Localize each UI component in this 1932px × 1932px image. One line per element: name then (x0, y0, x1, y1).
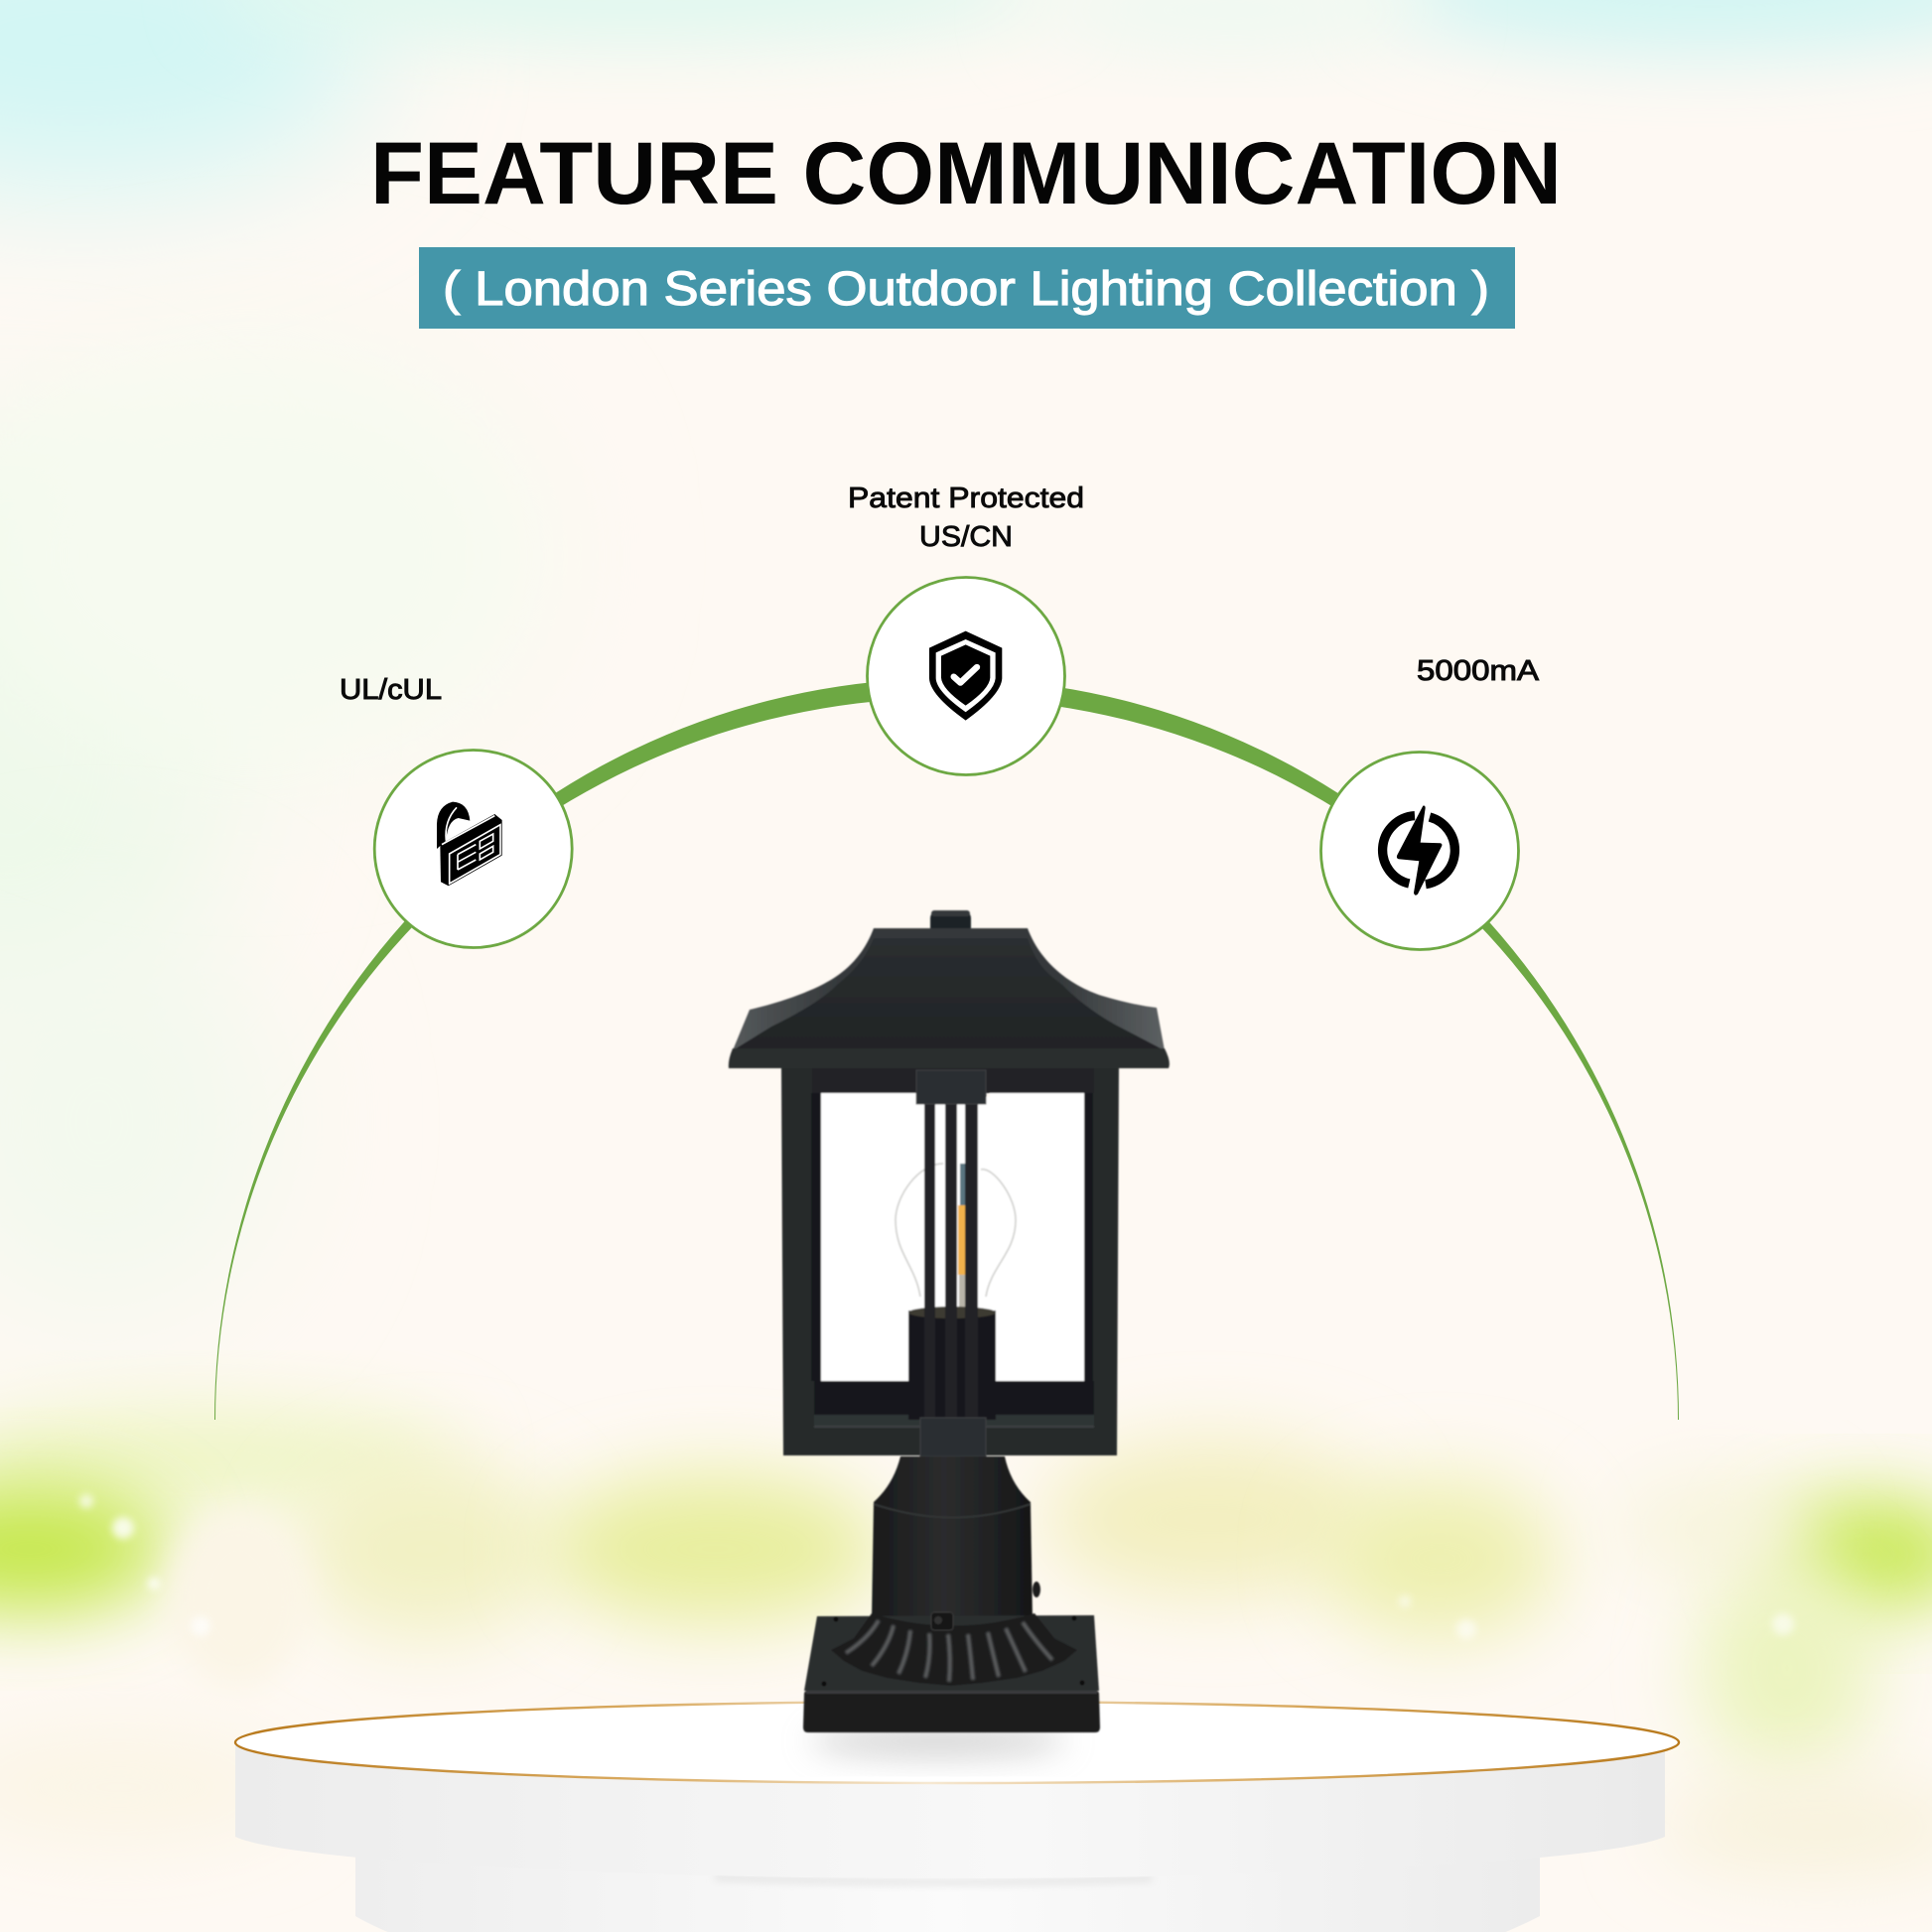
podium upper tier side (235, 1742, 1665, 1878)
feature node: UL/cUL (340, 674, 572, 947)
lamp socket (908, 1307, 996, 1420)
lamp neck (872, 1456, 1033, 1618)
fluted flange (831, 1613, 1077, 1686)
label: 5000mA: 5000mA (1417, 655, 1540, 687)
podium top surface with gold rim (235, 1702, 1679, 1783)
podium (235, 1702, 1679, 1932)
green arc connecting the feature icons (214, 678, 1679, 1420)
lamp centre bars and clamps (916, 1070, 986, 1456)
lamp cap knob (930, 910, 971, 935)
lamp glass panes (821, 1093, 1084, 1381)
lamp frame (781, 1068, 1119, 1455)
lamp bulb (896, 1164, 1016, 1311)
base plate (803, 1615, 1100, 1732)
product: post lantern lamp (729, 910, 1170, 1732)
feature node: 5000mA (1320, 655, 1540, 949)
icon: lightning bolt in ring (1383, 806, 1454, 896)
circle node (374, 751, 572, 947)
label: UL/cUL: UL/cUL (340, 674, 442, 706)
label: Patent Protected US/CN: US/CN (919, 521, 1013, 553)
label: Patent Protected US/CN (848, 483, 1084, 553)
podium lower tier (355, 1847, 1540, 1932)
subtitle banner: ( London Series Outdoor Lighting Collection ) (443, 263, 1489, 316)
circle node (868, 578, 1064, 774)
neck shoulder highlight (874, 1504, 1031, 1517)
set screws (931, 1582, 1040, 1630)
feature node: Patent Protected US/CN (848, 483, 1084, 774)
circle node (1320, 753, 1519, 949)
lamp roof (729, 928, 1170, 1068)
icon: shield with check (929, 631, 1002, 721)
subtitle banner (419, 247, 1515, 329)
label: Patent Protected US/CN: Patent Protected (848, 483, 1084, 514)
lamp shadow on podium (809, 1725, 1067, 1757)
icon: isometric padlock (437, 802, 502, 886)
title: FEATURE COMMUNICATION (370, 123, 1562, 222)
